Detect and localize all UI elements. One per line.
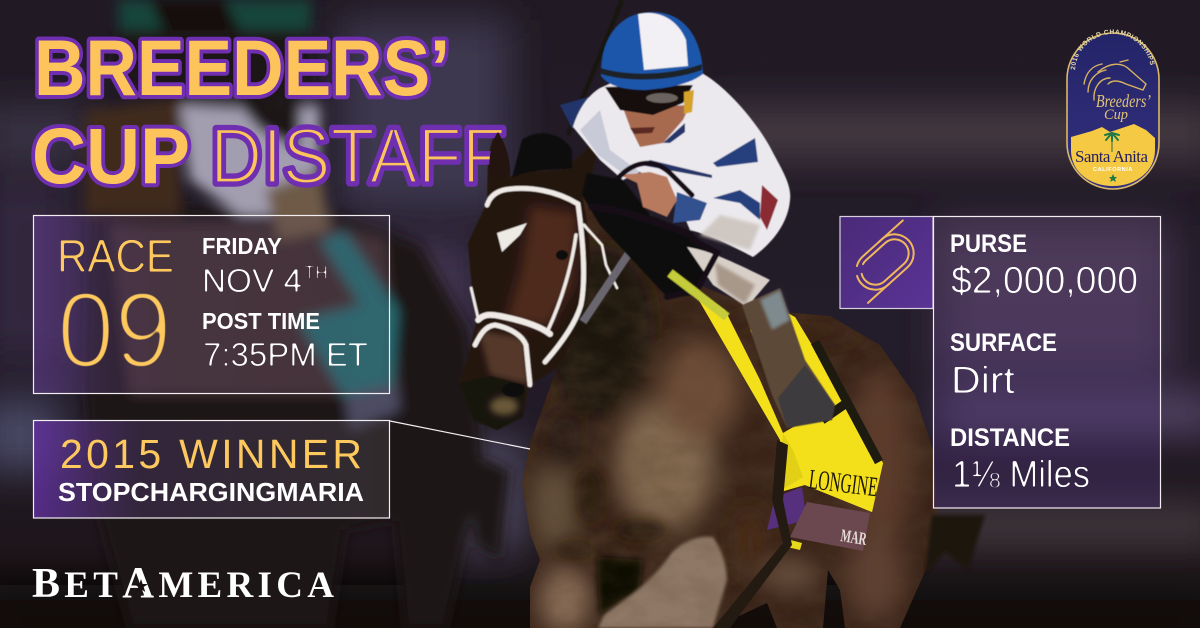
yellow strap [670, 273, 727, 317]
surface value: Dirt [951, 360, 1015, 402]
race info panel [34, 216, 390, 394]
hand [620, 172, 677, 217]
body creases [555, 467, 666, 558]
winner name: STOPCHARGINGMARIA [58, 477, 364, 507]
mountains on yellow field [1071, 124, 1155, 186]
horse head [459, 130, 653, 430]
title line 2 light: DISTAFF [210, 111, 506, 200]
background jockey shoulder [85, 100, 180, 215]
horse eye [556, 250, 568, 260]
track icon panel [840, 216, 933, 308]
horse tail [925, 515, 985, 575]
palm tree [1105, 133, 1119, 152]
post time label: POST TIME [202, 308, 320, 334]
badge wordmark cup: Cup [1104, 107, 1128, 123]
goggle strap [684, 90, 694, 114]
wrist cuff [673, 192, 707, 223]
white star on forehead [497, 223, 527, 252]
callout line to winner [390, 421, 530, 449]
badge wordmark: Breeders’ [1096, 91, 1151, 111]
purse value: $2,000,000 [951, 260, 1138, 302]
badge arc text: 2016 WORLD CHAMPIONSHIPS [1070, 29, 1155, 70]
race label: RACE [57, 230, 174, 282]
winner year: 2015 WINNER [60, 431, 362, 477]
main horse [450, 120, 985, 628]
day label: FRIDAY [202, 233, 282, 259]
goggles [605, 85, 693, 115]
date suffix: TH [304, 263, 328, 284]
blue collar [663, 123, 685, 143]
race number: 09 [57, 269, 172, 390]
face [623, 105, 690, 147]
cloth number [815, 342, 879, 462]
badge star [1109, 174, 1117, 182]
sleeve patch [760, 185, 778, 230]
silks [573, 70, 790, 257]
title line 2 bold: CUP [32, 111, 190, 200]
raised foreleg [598, 537, 727, 628]
star in logo [134, 579, 148, 592]
background jockey cap and torso [118, 0, 312, 34]
date: NOV 4 [202, 262, 302, 299]
blue back of collar [560, 93, 603, 128]
background horse tail [465, 450, 510, 560]
saddle cloth [690, 285, 883, 628]
background horse body [85, 205, 482, 628]
title line 2 outline: DISTAFF [210, 111, 506, 200]
race badge logo [1066, 29, 1160, 190]
distance label: DISTANCE [950, 424, 1070, 452]
background saddle cloth [298, 232, 398, 398]
mouth [630, 127, 655, 134]
post time value: 7:35PM ET [203, 336, 368, 373]
racetrack icon [843, 220, 928, 303]
pants [687, 247, 770, 307]
background jockey sleeve [180, 105, 320, 215]
jockey [560, 0, 835, 428]
distance value: 1⅛ Miles [952, 454, 1090, 496]
riding whip [568, 0, 622, 135]
horse mane [512, 133, 572, 178]
rein [583, 217, 653, 322]
silk bands [713, 138, 758, 167]
horse head line art [1084, 60, 1146, 100]
previous winner panel [34, 420, 390, 518]
state: CALIFORNIA [1093, 167, 1133, 173]
BetAmerica logo: BETAMERICA [32, 558, 334, 607]
white bridle [471, 188, 617, 385]
race facts panel [934, 216, 1160, 508]
horse name on cloth: MAR [839, 525, 869, 549]
title [32, 23, 506, 200]
purse label: PURSE [950, 230, 1027, 258]
leg gap shadow [597, 557, 643, 615]
mane and dark saddle area [582, 173, 717, 298]
background horse and jockey, out of focus [85, 0, 510, 628]
girth strap [713, 440, 792, 628]
number cloth sponsor text: LONGINE [807, 464, 879, 503]
title line 1: BREEDERS’ [34, 23, 450, 112]
rein loop and straps [592, 163, 717, 297]
helmet [601, 12, 703, 90]
horse left ear overlapping title [489, 132, 510, 178]
venue name: Santa Anita [1075, 147, 1148, 166]
boot [742, 288, 835, 428]
surface label: SURFACE [950, 329, 1057, 357]
